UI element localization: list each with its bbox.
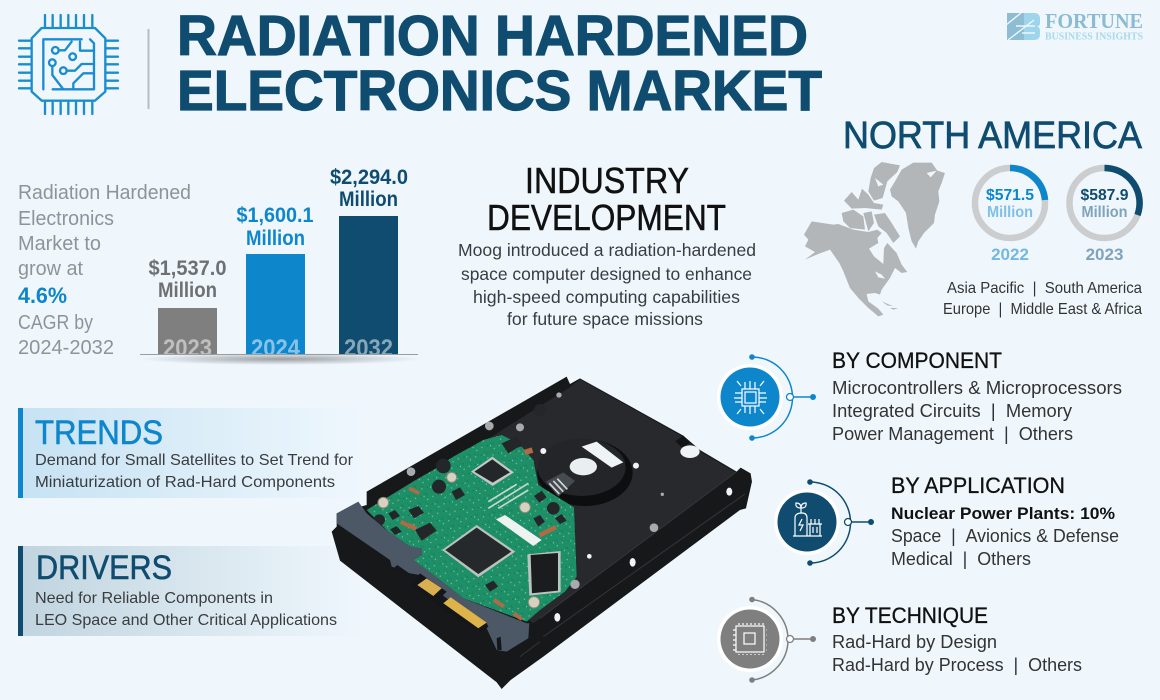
panel: drivers	[18, 546, 363, 636]
panel: trends: Miniaturization of Rad-Hard Components	[35, 474, 335, 491]
segment text: by component	[832, 348, 1122, 444]
segment text: by application: Space | Avionics & Defense	[891, 526, 1119, 546]
text: industry development body: space computer designed to enhance	[461, 264, 752, 284]
small components	[374, 404, 567, 592]
bar chart: market size: Million	[158, 279, 217, 302]
segment text: by component: Power Management | Others	[832, 424, 1073, 444]
icon: circuit chip	[19, 15, 118, 114]
image: hard drive with circuit board	[332, 377, 752, 689]
text: other regions: Europe | Middle East & Africa	[943, 301, 1142, 318]
donut: 2022	[975, 168, 1045, 264]
segment text: by component: Microcontrollers & Microprocessors	[832, 378, 1122, 398]
donut: 2022: 2022	[991, 245, 1029, 264]
drive top plate	[420, 379, 736, 623]
bar chart: market size: 2024	[251, 335, 301, 362]
connector housing	[337, 502, 529, 652]
text: CAGR summary: Electronics	[18, 208, 114, 230]
panel: trends: TRENDS	[35, 414, 163, 452]
divider	[148, 29, 150, 109]
donut: 2022: Million	[987, 204, 1033, 221]
bar chart: market size: Million	[246, 227, 305, 250]
segment text: by component: BY COMPONENT	[832, 348, 1002, 373]
text: CAGR summary: Radiation Hardened	[18, 182, 191, 204]
spindle disc	[537, 439, 633, 506]
text: other regions	[943, 280, 1142, 318]
bar chart: market size	[140, 166, 420, 365]
text: CAGR summary: 2024-2032	[18, 337, 114, 359]
heading: North America: NORTH AMERICA	[843, 115, 1143, 157]
screws and holes	[378, 472, 540, 608]
text: CAGR summary: 4.6%	[18, 283, 67, 308]
segment text: by application	[891, 473, 1119, 569]
circuit board	[367, 435, 577, 622]
text: industry development body: Moog introduced a radiation-hardened	[458, 240, 756, 260]
donut: 2023: Million	[1082, 204, 1128, 221]
logo: Fortune Business Insights: BUSINESS INSIGHTS	[1045, 32, 1143, 42]
text: CAGR summary	[18, 182, 191, 359]
segment icon: by technique	[717, 597, 816, 683]
heading: industry development	[487, 160, 726, 238]
segment icon: by application	[774, 479, 874, 566]
logo: Fortune Business Insights: FORTUNE	[1045, 9, 1143, 33]
map: North America	[804, 162, 945, 316]
title: ELECTRONICS MARKET	[177, 59, 822, 123]
panel: trends	[18, 408, 363, 498]
logo: Fortune Business Insights	[1006, 9, 1143, 42]
panel: drivers: LEO Space and Other Critical Applications	[35, 612, 337, 629]
donut: 2023: $587.9	[1080, 187, 1129, 204]
bar chart: market size: $2,294.0	[330, 166, 408, 189]
text: CAGR summary: grow at	[18, 258, 83, 280]
segment text: by technique: Rad-Hard by Process | Others	[832, 655, 1082, 675]
drive silhouette	[332, 377, 752, 689]
segment text: by technique	[832, 603, 1082, 675]
plate notch	[675, 436, 690, 447]
bar chart: market size: 2032	[344, 335, 393, 362]
panel: trends: Demand for Small Satellites to Set Trend for	[35, 452, 354, 469]
memory chip	[527, 551, 561, 596]
trace stripes	[488, 483, 528, 508]
segment text: by component: Integrated Circuits | Memory	[832, 401, 1072, 421]
segment text: by application: Nuclear Power Plants: 10%	[891, 504, 1115, 523]
text: industry development body	[458, 240, 756, 329]
bar chart: market size: $1,600.1	[236, 204, 314, 227]
title: RADIATION HARDENED	[177, 4, 808, 68]
bar chart: market size: 2023	[163, 335, 212, 362]
donut: 2023: 2023	[1086, 245, 1123, 264]
segment icon: by component	[717, 354, 816, 441]
segment text: by application: Medical | Others	[891, 549, 1031, 569]
bar chart: market size: $1,537.0	[148, 257, 226, 280]
title	[177, 4, 822, 123]
panel: drivers: Need for Reliable Components in	[35, 590, 273, 607]
heading: industry development: INDUSTRY	[525, 160, 689, 201]
donut: 2022: $571.5	[986, 187, 1034, 204]
segment text: by technique: BY TECHNIQUE	[832, 603, 988, 628]
text: industry development body: for future space missions	[507, 309, 703, 329]
segment text: by technique: Rad-Hard by Design	[832, 632, 997, 652]
text: CAGR summary: CAGR by	[18, 312, 93, 334]
text: industry development body: high-speed computing capabilities	[473, 287, 740, 307]
main chip	[442, 525, 515, 577]
wall ribs	[520, 472, 745, 657]
text: CAGR summary: Market to	[18, 233, 101, 255]
bar chart: market size: Million	[339, 188, 398, 211]
text: other regions: Asia Pacific | South America	[947, 280, 1142, 297]
donut: 2023	[1070, 168, 1140, 264]
secondary chip	[471, 457, 514, 486]
board label	[496, 515, 542, 546]
segment text: by application: BY APPLICATION	[891, 473, 1065, 498]
heading: industry development: DEVELOPMENT	[487, 197, 726, 238]
panel: drivers: DRIVERS	[36, 549, 172, 587]
